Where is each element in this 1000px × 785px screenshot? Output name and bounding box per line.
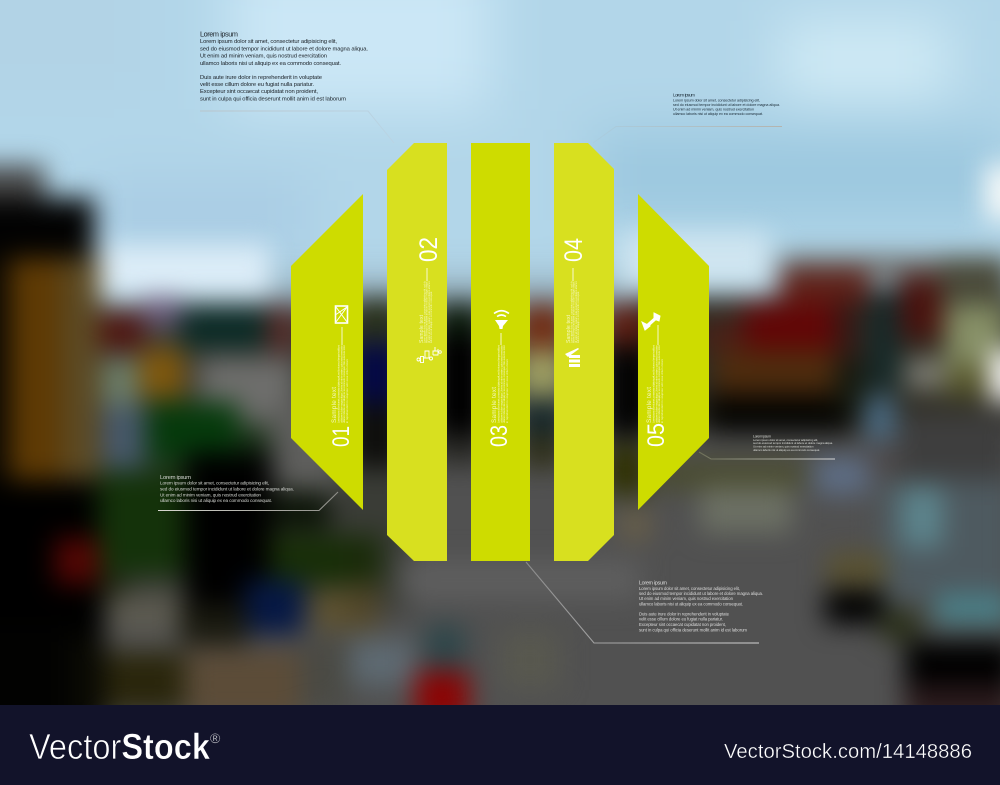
sample text 04: Ut enim ad minim veniam, quis nostrud exercitation ullamco bbox=[575, 280, 578, 343]
text block: top left bbox=[200, 30, 368, 102]
text block: bottom: Lorem ipsum dolor sit amet, consectetur adipisicing elit, bbox=[639, 586, 740, 591]
sample text 01: Lorem ipsum dolor sit amet, consectetur adipisicing elit, sed do eiusmod tempor incididunt bbox=[336, 345, 340, 423]
sample text 02: Lorem ipsum dolor sit amet, consectetur adipisicing elit, sed do bbox=[424, 280, 426, 343]
horizon strip bbox=[90, 312, 410, 612]
sample text 04: laboris nisi ut aliquip ex ea commodo consequat. bbox=[577, 291, 580, 343]
number 01: 01 bbox=[328, 426, 355, 447]
leader line: top right bbox=[593, 126, 782, 143]
text block: top left: Lorem ipsum dolor sit amet, consectetur adipisicing elit, bbox=[200, 39, 337, 45]
text block: left: Lorem ipsum bbox=[160, 475, 191, 481]
icon: wrench bbox=[642, 313, 660, 330]
sample text 02: Ut enim ad minim veniam, quis nostrud exercitation ullamco bbox=[428, 280, 431, 343]
footer logo: VectorStock: ® bbox=[210, 730, 221, 746]
sample text 05: Sample text bbox=[646, 387, 653, 423]
right lower street bbox=[900, 412, 1000, 480]
text block: left: Lorem ipsum dolor sit amet, consectetur adipisicing elit, bbox=[160, 481, 269, 486]
left street blocks bbox=[100, 314, 144, 350]
text block: bottom: sunt in culpa qui officia deserunt mollit anim id est laborum bbox=[639, 627, 747, 632]
sample text 04: eiusmod tempor incididunt ut labore et dolore magna aliqua. bbox=[573, 281, 576, 343]
text block: top left: velit esse cillum dolore eu fugiat nulla pariatur. bbox=[200, 82, 314, 88]
sample text 02 bbox=[419, 280, 433, 343]
sample text 05 bbox=[646, 344, 664, 423]
gaps between bars bbox=[363, 280, 387, 348]
sample text 02: eiusmod tempor incididunt ut labore et dolore magna aliqua. bbox=[426, 281, 429, 343]
sample text 03 bbox=[491, 344, 509, 423]
text block: top right: sed do eiusmod tempor incididunt ut labore et dolore magna aliqua. bbox=[673, 103, 780, 107]
text block: top right: Ut enim ad minim veniam, quis nostrud exercitation bbox=[673, 108, 754, 112]
sample text 05: ullamco laboris nisi ut aliquip ex ea commodo consequat. Duis aute irure dolor bbox=[657, 345, 661, 423]
text block: top left: sed do eiusmod tempor incididunt ut labore et dolore magna aliqua. bbox=[200, 46, 368, 52]
bottom centre bbox=[425, 625, 465, 671]
icon: envelope bbox=[336, 306, 348, 323]
leader line: left bbox=[158, 492, 338, 510]
sample text 03: in reprehenderit in voluptate velit esse cillum dolore bbox=[505, 358, 509, 423]
sample text 03: ullamco laboris nisi ut aliquip ex ea commodo consequat. Duis aute irure dolor bbox=[502, 345, 506, 423]
text block: bottom: Excepteur sint occaecat cupidatat non proident, bbox=[639, 622, 726, 627]
sample text 01: ut labore et dolore magna aliqua. Ut enim ad minim veniam, quis nostrud exercitation bbox=[339, 344, 343, 423]
text block: top left: Excepteur sint occaecat cupidatat non proident, bbox=[200, 89, 318, 95]
text block: top right: Lorem ipsum bbox=[673, 92, 695, 98]
left building bbox=[0, 165, 45, 265]
text block: top left: ullamco laboris nisi ut aliquip ex ea commodo consequat. bbox=[200, 61, 341, 67]
text block: bottom: velit esse cillum dolore eu fugiat nulla pariatur. bbox=[639, 617, 723, 622]
sample text 03: ut labore et dolore magna aliqua. Ut enim ad minim veniam, quis nostrud exercitation bbox=[499, 344, 503, 423]
text block: bottom bbox=[639, 580, 763, 632]
text block: bottom: Duis aute irure dolor in reprehenderit in voluptate bbox=[639, 611, 730, 616]
text block: right bbox=[753, 434, 833, 452]
text block: top left: Ut enim ad minim veniam, quis nostrud exercitation bbox=[200, 54, 327, 60]
text block: top left: Lorem ipsum bbox=[200, 30, 238, 38]
sample text 04: Lorem ipsum dolor sit amet, consectetur adipisicing elit, sed do bbox=[570, 280, 574, 343]
sample text 01: ullamco laboris nisi ut aliquip ex ea commodo consequat. Duis aute irure dolor bbox=[342, 345, 346, 423]
sample text 05: Lorem ipsum dolor sit amet, consectetur adipisicing elit, sed do eiusmod tempor incididunt bbox=[652, 345, 656, 423]
leader line: bottom bbox=[526, 562, 759, 643]
text block: bottom: Ut enim ad minim veniam, quis nostrud exercitation bbox=[639, 596, 734, 601]
number 03: 03 bbox=[486, 425, 513, 447]
text block: top right bbox=[673, 92, 780, 116]
footer band bbox=[0, 705, 1000, 785]
text block: left: ullamco laboris nisi ut aliquip ex ea commodo consequat. bbox=[160, 498, 272, 503]
text block: right: Lorem ipsum dolor sit amet, consectetur adipisicing elit, bbox=[753, 438, 818, 442]
panel 03 bbox=[471, 143, 530, 561]
sample text 02: Sample text bbox=[419, 314, 425, 343]
text block: left bbox=[160, 475, 294, 503]
text block: top left: Duis aute irure dolor in reprehenderit in voluptate bbox=[200, 75, 322, 81]
number 05: 05 bbox=[643, 423, 670, 447]
footer image id: VectorStock.com/14148886 bbox=[724, 741, 972, 763]
text block: right: Lorem ipsum bbox=[753, 434, 771, 438]
sample text 03: Lorem ipsum dolor sit amet, consectetur adipisicing elit, sed do eiusmod tempor incididunt bbox=[496, 345, 500, 423]
icon: chart bars bbox=[565, 348, 580, 367]
text block: top left: sunt in culpa qui officia deserunt mollit anim id est laborum bbox=[200, 96, 346, 102]
sample text 01 bbox=[331, 344, 349, 423]
icon: two people bbox=[417, 347, 441, 362]
text block: right: sed do eiusmod tempor incididunt ut labore et dolore magna aliqua. bbox=[753, 441, 833, 445]
text block: bottom: sed do eiusmod tempor incididunt ut labore et dolore magna aliqua. bbox=[639, 591, 763, 596]
sample text 04 bbox=[566, 280, 580, 343]
number 04: 04 bbox=[560, 238, 588, 262]
leader line: top left bbox=[200, 111, 394, 143]
panel 05 bbox=[638, 194, 709, 510]
number 02: 02 bbox=[415, 237, 443, 262]
footer logo: VectorStock: VectorStock bbox=[29, 726, 211, 767]
sample text 04: Sample text bbox=[566, 314, 572, 343]
panel 04 bbox=[554, 143, 614, 561]
text block: bottom: ullamco laboris nisi ut aliquip ex ea commodo consequat. bbox=[639, 601, 743, 606]
text block: left: sed do eiusmod tempor incididunt ut labore et dolore magna aliqua. bbox=[160, 487, 294, 492]
right red building bbox=[780, 256, 1000, 278]
sample text 03: Sample text bbox=[491, 387, 498, 423]
text block: right: ullamco laboris nisi ut aliquip ex ea commodo consequat. bbox=[753, 448, 820, 452]
panel 01 bbox=[291, 194, 363, 510]
panel 02 bbox=[387, 143, 447, 561]
sample text 05: ut labore et dolore magna aliqua. Ut enim ad minim veniam, quis nostrud exercitation bbox=[654, 344, 658, 423]
text block: top right: Lorem ipsum dolor sit amet, consectetur adipisicing elit, bbox=[673, 98, 760, 102]
text block: left: Ut enim ad minim veniam, quis nostrud exercitation bbox=[160, 492, 261, 497]
sample text 02: laboris nisi ut aliquip ex ea commodo consequat. bbox=[430, 291, 433, 343]
leader line: right bbox=[699, 452, 835, 459]
icon: signal bbox=[494, 311, 509, 329]
sample text 01: in reprehenderit in voluptate velit esse cillum dolore bbox=[345, 358, 349, 423]
text block: bottom: Lorem ipsum bbox=[639, 580, 668, 586]
sample text 05: in reprehenderit in voluptate velit esse cillum dolore bbox=[660, 358, 664, 423]
text block: top right: ullamco laboris nisi ut aliquip ex ea commodo consequat. bbox=[673, 112, 763, 116]
text block: right: Ut enim ad minim veniam, quis nostrud exercitation bbox=[753, 444, 814, 448]
sample text 01: Sample text bbox=[331, 387, 338, 423]
